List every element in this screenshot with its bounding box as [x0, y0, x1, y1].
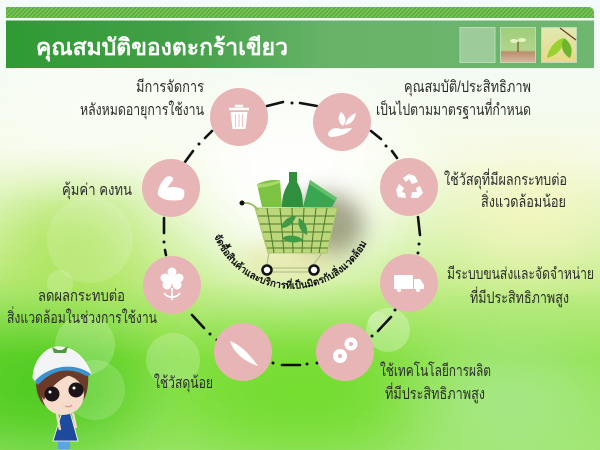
icon: gears — [316, 323, 374, 381]
icon: delivery truck — [380, 254, 438, 312]
cart handle and wheels — [240, 200, 322, 274]
label: efficient production technology — [380, 361, 491, 404]
icon: trash bin — [210, 88, 268, 146]
icon: recycle — [380, 158, 438, 216]
central shopping cart — [215, 172, 376, 290]
ring connectors — [162, 102, 420, 366]
label: efficient distribution: ที่มีประสิทธิภาพสูง — [470, 286, 569, 308]
goods: cylinder, bottle, box — [257, 172, 337, 207]
icon: flower — [143, 256, 201, 314]
label: end of life management: หลังหมดอายุการใช้งาน — [80, 100, 204, 120]
label: low impact material: สิ่งแวดล้อมน้อย — [481, 190, 566, 211]
icon: feather — [214, 323, 272, 381]
recycle leaves — [281, 216, 307, 242]
label: value and durability: คุ้มค่า คงทน — [62, 181, 132, 200]
curved caption: จัดซื้อสินค้าและบริการที่เป็นมิตรกับสิ่งแวดล้อม — [215, 234, 367, 290]
label: low impact material — [444, 168, 567, 211]
label: quality meets standards: คุณสมบัติ/ประสิทธิภาพ — [404, 79, 531, 97]
cart basket — [255, 208, 337, 253]
mascot girl — [33, 346, 91, 449]
header banner — [6, 7, 594, 68]
label: reduce impact during use — [7, 288, 157, 327]
label: efficient production technology: ที่มีประสิทธิภาพสูง — [385, 382, 485, 404]
icon: flexed arm — [142, 159, 200, 217]
label: end of life management — [80, 78, 204, 120]
label: efficient distribution — [447, 265, 594, 308]
label: quality meets standards: เป็นไปตามมาตรฐานที่กำหนด — [376, 98, 531, 119]
label: quality meets standards — [376, 79, 531, 119]
icon: hand with plant — [313, 93, 371, 151]
thumbnail: leaves — [542, 28, 576, 62]
label: use less material: ใช้วัสดุน้อย — [154, 373, 213, 393]
label: reduce impact during use: ลดผลกระทบต่อ — [38, 288, 125, 305]
thumbnail: sprout — [500, 28, 536, 62]
label: low impact material: ใช้วัสดุที่มีผลกระทบต่อ — [444, 168, 567, 190]
label: reduce impact during use: สิ่งแวดล้อมในช่วงการใช้งาน — [7, 306, 157, 327]
thumbnail: plain — [460, 28, 495, 62]
title: คุณสมบัติของตะกร้าเขียว — [36, 35, 288, 62]
label: efficient production technology: ใช้เทคโนโลยีการผลิต — [380, 361, 491, 380]
label: end of life management: มีการจัดการ — [136, 78, 204, 96]
